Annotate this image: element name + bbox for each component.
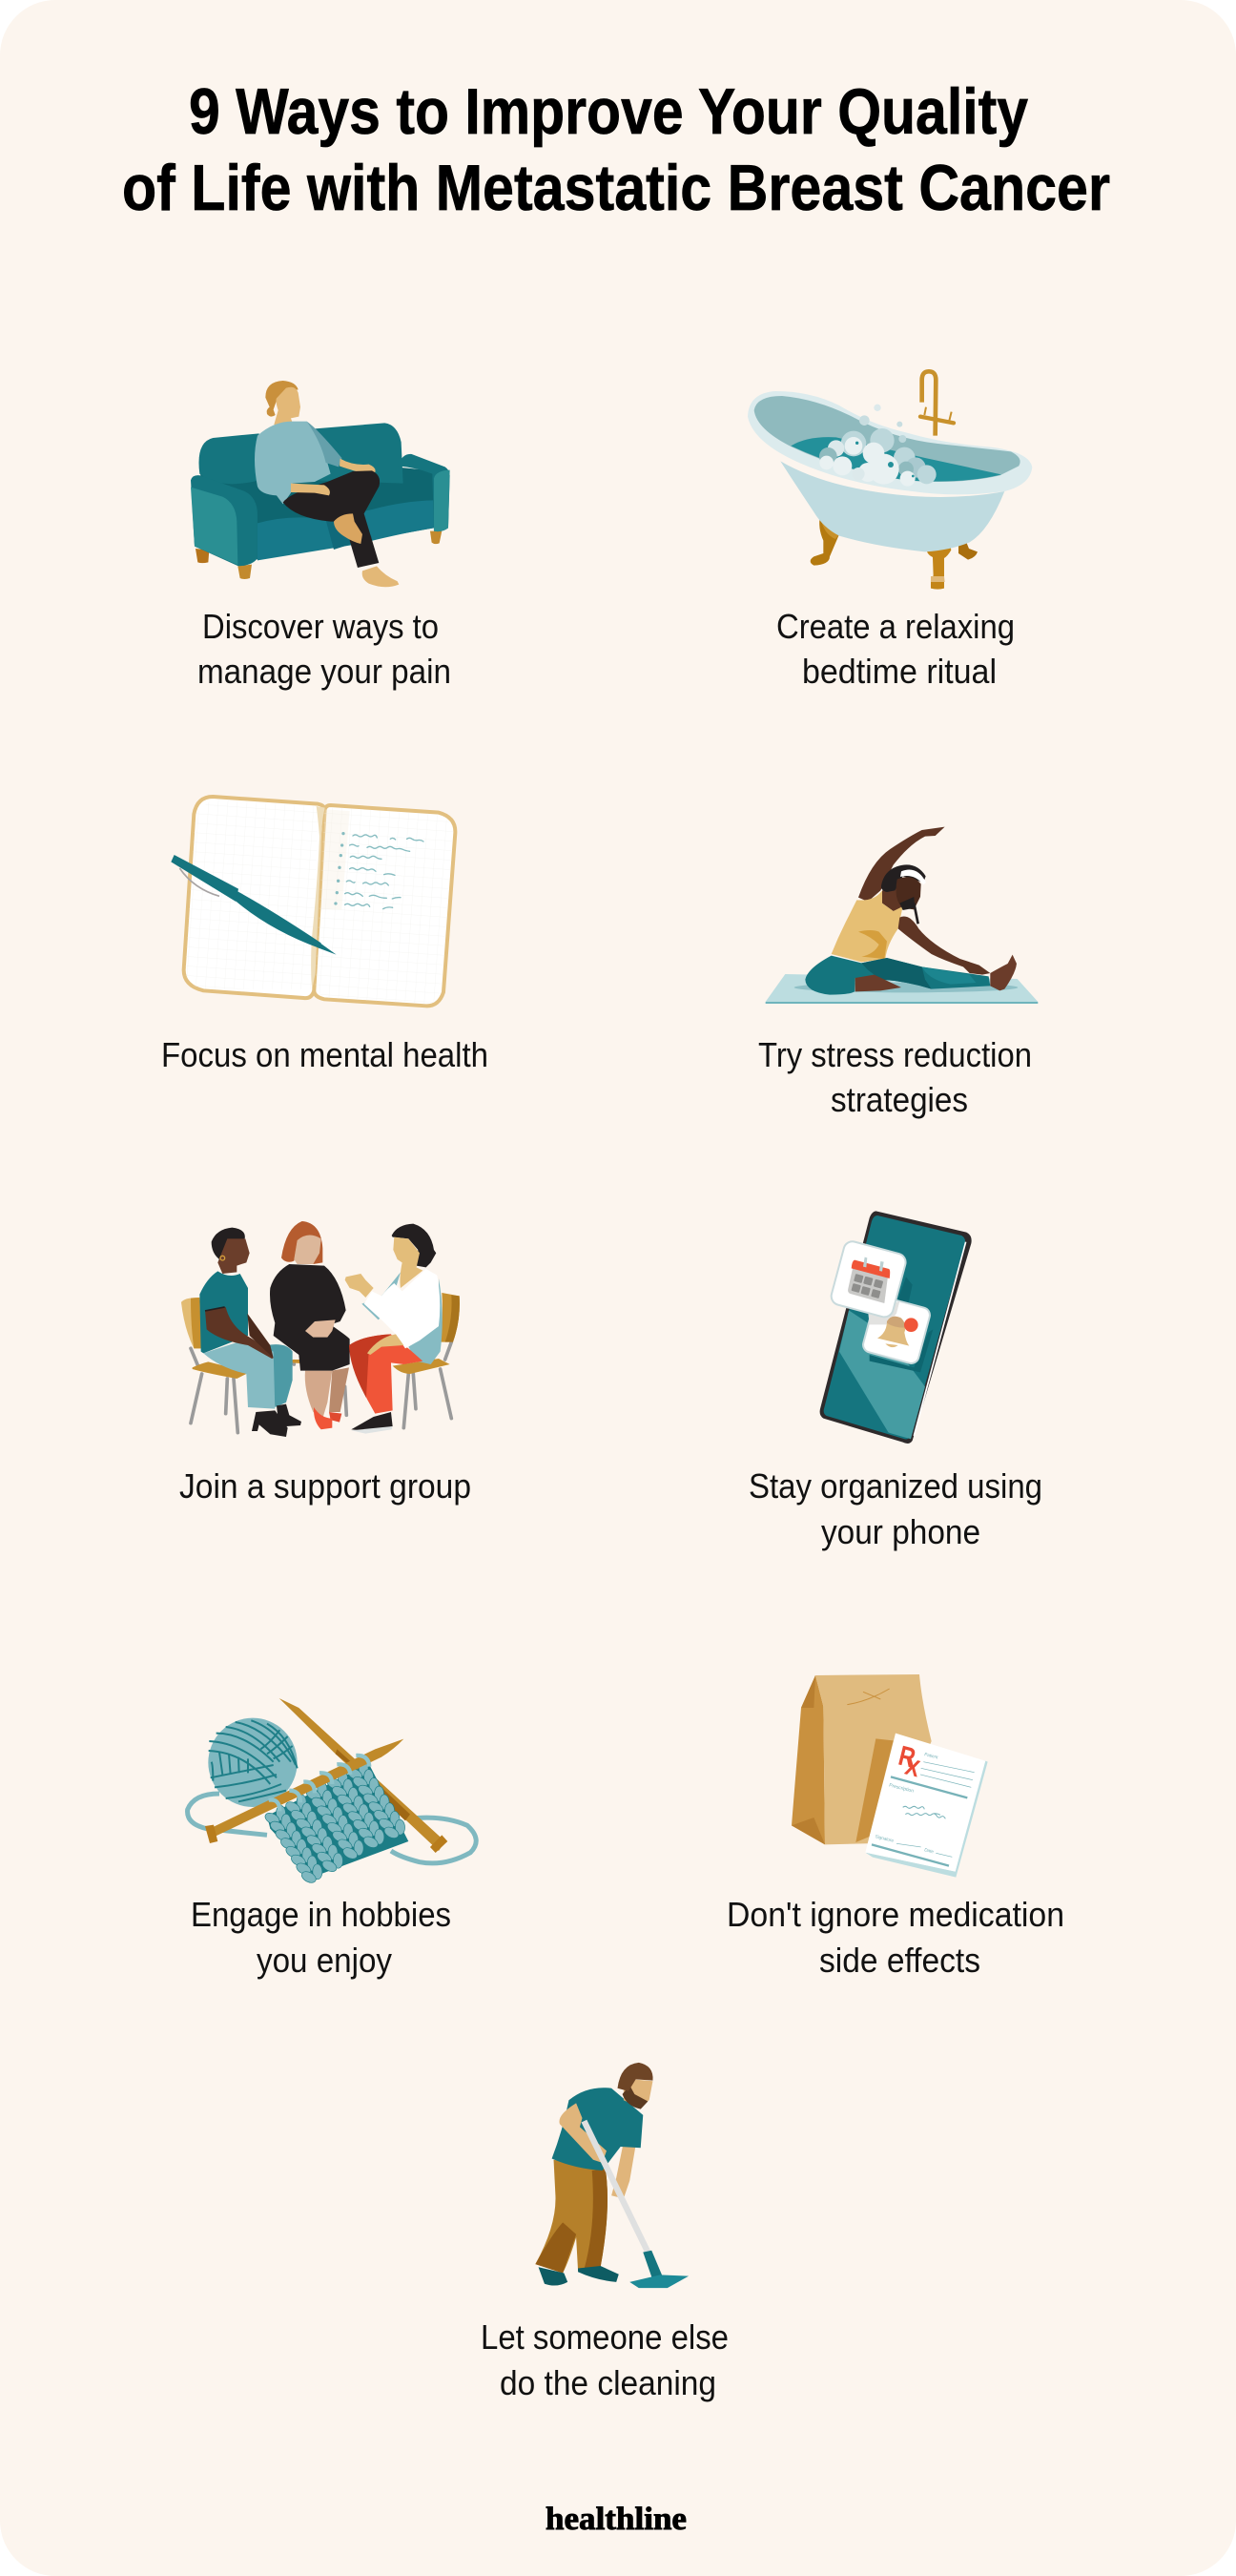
label: phone: Stay organized using <box>749 1466 1042 1506</box>
label: stress <box>758 1035 1032 1119</box>
label: bedtime: bedtime ritual <box>802 652 997 691</box>
back needle <box>279 1698 445 1851</box>
water <box>791 437 1001 481</box>
paper bag <box>792 1674 932 1844</box>
label: bedtime: Create a relaxing <box>776 607 1015 646</box>
notebook pages <box>184 797 455 1006</box>
label: medication <box>727 1895 1064 1980</box>
mop <box>584 2121 689 2288</box>
title: 9 Ways to Improve Your Quality <box>189 75 1028 148</box>
shirt <box>552 2088 643 2171</box>
phone body <box>820 1211 972 1444</box>
prescription sheet: Prescription <box>889 1782 915 1795</box>
label: medication: side effects <box>819 1941 980 1980</box>
screen highlight <box>839 1310 925 1439</box>
shoes <box>539 2266 619 2286</box>
illustration: open notebook with pen <box>171 797 455 1006</box>
label: hobbies: Engage in hobbies <box>191 1895 451 1934</box>
label: bedtime <box>776 607 1015 691</box>
prescription sheet <box>865 1734 988 1878</box>
woman stretching <box>805 827 1017 995</box>
label: phone <box>749 1466 1042 1551</box>
illustration: pharmacy bag and prescription <box>792 1674 988 1878</box>
label: stress: Try stress reduction <box>758 1035 1032 1074</box>
label: stress: strategies <box>831 1080 968 1119</box>
label: cleaning <box>481 2317 729 2402</box>
prescription sheet: X <box>902 1755 922 1782</box>
illustration: clawfoot bathtub <box>748 371 1032 590</box>
illustration: phone with app cards <box>820 1211 972 1444</box>
form lines <box>872 1762 975 1866</box>
front arm <box>559 2103 607 2163</box>
knit fabric <box>260 1756 412 1889</box>
label: hobbies <box>191 1895 451 1980</box>
person: right <box>345 1224 443 1434</box>
label: hobbies: you enjoy <box>257 1941 392 1980</box>
foam bubbles <box>819 405 937 487</box>
tub rim <box>748 391 1032 494</box>
label: support group: Join a support group <box>179 1466 471 1506</box>
tub interior <box>754 396 1020 482</box>
title: of Life with Metastatic Breast Cancer <box>122 152 1110 224</box>
yarn ball <box>208 1718 298 1807</box>
illustration: man mopping <box>535 2063 689 2288</box>
label: pain <box>197 607 451 691</box>
screen <box>824 1215 965 1439</box>
title <box>122 75 1110 224</box>
logo: healthline: healthline <box>546 2502 687 2537</box>
illustration: yoga stretch <box>766 827 1038 1004</box>
label: medication: Don't ignore medication <box>727 1895 1064 1934</box>
stitch loops <box>269 1755 369 1811</box>
prescription sheet: Patient <box>924 1752 939 1760</box>
label: mental health: Focus on mental health <box>161 1035 488 1074</box>
label: pain: Discover ways to <box>202 607 439 646</box>
illustration: support group <box>181 1221 460 1437</box>
chairs <box>181 1293 460 1433</box>
back arm <box>611 2142 636 2198</box>
label: cleaning: Let someone else <box>481 2317 729 2357</box>
label: cleaning: do the cleaning <box>500 2363 716 2402</box>
woman <box>255 381 399 587</box>
handwritten list <box>335 833 423 909</box>
illustration: woman on couch <box>191 381 450 587</box>
head <box>617 2063 653 2109</box>
illustration: knitting <box>188 1698 476 1889</box>
tub body <box>780 461 1004 551</box>
tub feet <box>811 516 978 590</box>
prescription sheet: Signature <box>875 1834 895 1843</box>
front needle <box>208 1739 403 1837</box>
rx mark: R <box>896 1740 918 1775</box>
pen <box>171 855 337 955</box>
faucet <box>920 371 954 436</box>
couch <box>191 423 450 579</box>
yoga mat <box>766 974 1038 1004</box>
prescription sheet: Date <box>924 1847 935 1854</box>
yarn strand <box>188 1794 476 1863</box>
pants <box>535 2160 608 2273</box>
person: middle <box>270 1221 350 1429</box>
label: phone: your phone <box>821 1512 980 1551</box>
card shadows <box>896 1277 913 1307</box>
person: left <box>199 1228 301 1437</box>
calendar card <box>830 1239 908 1319</box>
bell card <box>861 1295 932 1365</box>
label: pain: manage your pain <box>197 652 451 691</box>
